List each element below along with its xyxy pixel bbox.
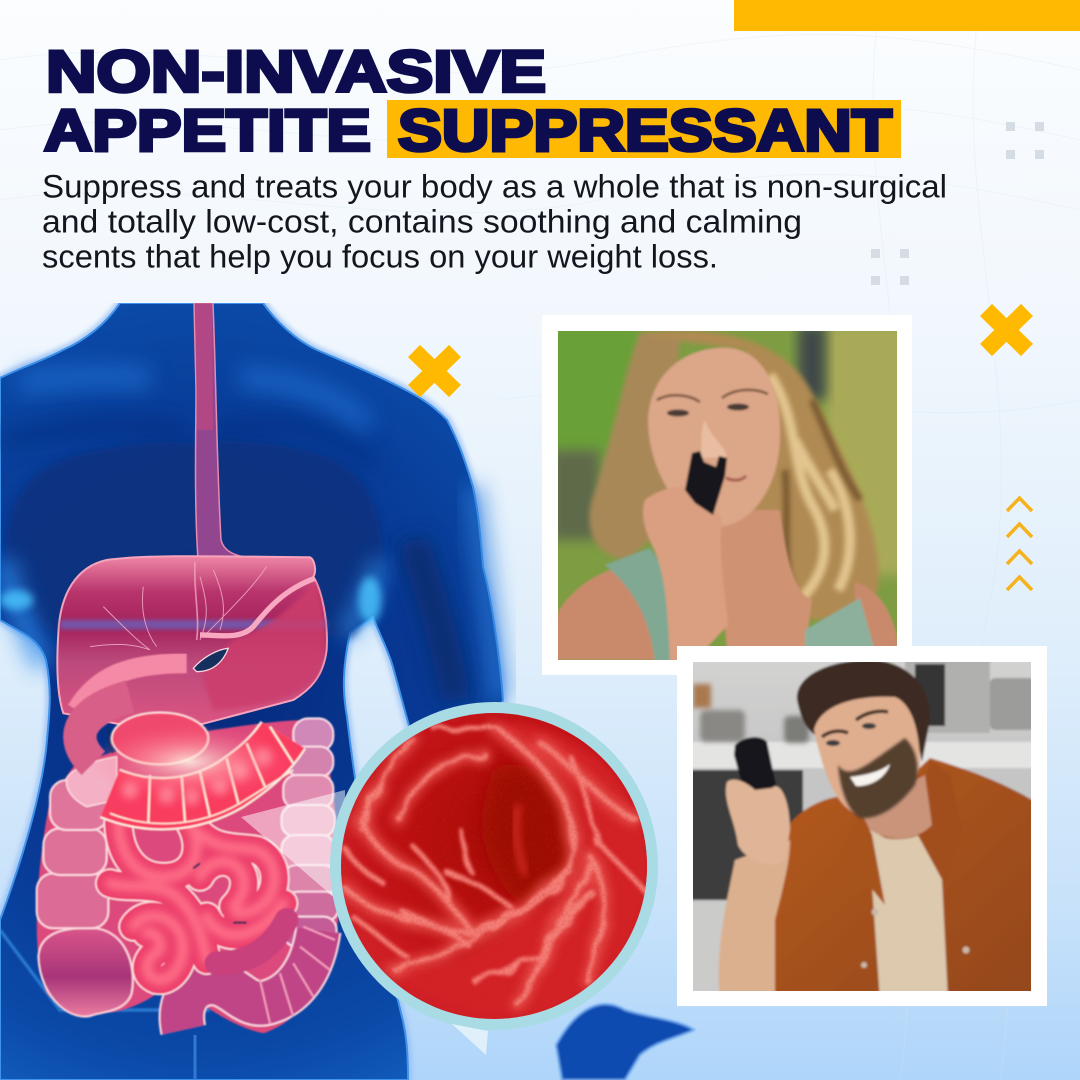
- gap marks: [108, 728, 247, 923]
- chevrons: [1007, 498, 1032, 590]
- photo frame: [677, 646, 1047, 1006]
- hand: [726, 780, 790, 864]
- stomach opening: [193, 648, 228, 672]
- outer tissue bank: [392, 724, 649, 1016]
- arm: [719, 840, 790, 1000]
- colon pale top: [66, 757, 117, 807]
- sigmoid colon: [182, 930, 318, 1030]
- lumen inner light: [516, 805, 525, 875]
- stomach edge: [200, 578, 315, 636]
- hair: [797, 660, 930, 762]
- lower hip glow left: [0, 930, 210, 1010]
- tank top right: [805, 598, 878, 662]
- colon haustra: [110, 727, 293, 824]
- microwave: [905, 655, 990, 733]
- inhaler: [734, 737, 776, 797]
- jacket buttons: [861, 908, 970, 968]
- jacket: [770, 758, 1040, 1000]
- counter: [685, 742, 1035, 768]
- pot: [700, 710, 745, 742]
- ascending colon lobes: [37, 780, 108, 928]
- torso silhouette: [0, 303, 503, 1080]
- pectoral mass: [7, 441, 383, 637]
- stomach lower loop: [112, 712, 208, 764]
- lumen: [482, 764, 572, 905]
- photo: man holding inhaler: [677, 646, 1047, 1006]
- small pot: [784, 716, 809, 743]
- lower right torso: [347, 560, 380, 637]
- blue band: [60, 620, 327, 629]
- hair left: [589, 332, 680, 560]
- title: [44, 40, 901, 164]
- eyes: [667, 404, 749, 416]
- esophagus: [193, 303, 242, 556]
- liver body: [57, 556, 327, 733]
- arm edge light: [473, 487, 500, 700]
- yellow cross left: [414, 351, 455, 391]
- decorative dots: [871, 122, 1044, 285]
- armpit glow right: [359, 577, 381, 623]
- oven: [685, 770, 803, 900]
- lower left shade: [550, 450, 600, 540]
- arm shade: [413, 540, 457, 700]
- photo frame: [542, 315, 912, 675]
- transverse colon: [110, 735, 283, 804]
- stomach body: [200, 580, 325, 710]
- highlight behind SUPPRESSANT: [387, 100, 901, 158]
- anatomy illustration: [0, 303, 694, 1080]
- description text: scents that help you focus on your weight loss.: [42, 238, 718, 274]
- shirt: [868, 828, 948, 1000]
- upper loop band: [80, 697, 130, 763]
- descending colon lobes: [282, 718, 338, 947]
- face: [648, 348, 780, 527]
- title line 1: NON-INVASIVE: [46, 40, 546, 104]
- highlighted word: SUPPRESSANT: [398, 98, 892, 164]
- small intestine loops: [110, 823, 283, 980]
- chest and shoulder shading: [0, 376, 500, 700]
- circle ring: [330, 702, 658, 1030]
- colon highlights: [121, 748, 272, 805]
- nose: [700, 420, 727, 458]
- red tissue: [341, 713, 647, 1019]
- top accent bar: [734, 0, 1080, 31]
- shelf items: [693, 684, 711, 708]
- tissue rim: [395, 727, 574, 972]
- cecum lump: [38, 928, 133, 1017]
- description text: and totally low-cost, contains soothing and calming: [42, 204, 802, 240]
- title line 2: APPETITE: [44, 98, 371, 164]
- shoulder light: [20, 376, 367, 427]
- tree trunk: [798, 325, 826, 400]
- filaments thick: [345, 742, 648, 1005]
- sigmoid ribs: [260, 927, 335, 1023]
- lips: [726, 476, 746, 480]
- hair top and right: [640, 330, 879, 620]
- hand: [643, 487, 728, 665]
- filaments soft halo: [345, 728, 635, 1005]
- transverse colon fill: [110, 735, 283, 804]
- sigmoid fill: [182, 930, 318, 1030]
- description text: Suppress and treats your body as a whole that is non-surgical: [42, 168, 947, 204]
- neck and chest: [705, 510, 812, 650]
- tank strap left: [605, 548, 690, 662]
- microwave door: [915, 664, 945, 726]
- collar left: [840, 812, 885, 905]
- hair shadows: [785, 400, 860, 600]
- central glow: [90, 724, 290, 800]
- right foliage: [825, 325, 905, 575]
- magnified tissue circle: [330, 702, 658, 1030]
- vertical lobe line: [195, 562, 198, 640]
- face: [814, 697, 920, 817]
- small pointer below circle: [452, 1024, 488, 1055]
- garden background: [550, 325, 905, 665]
- lower magenta loop: [217, 920, 287, 963]
- smile: [850, 764, 890, 786]
- esophagus top tint: [195, 303, 213, 430]
- lower left torso: [7, 560, 43, 667]
- brows: [657, 390, 768, 402]
- tissue grain: [341, 713, 647, 1019]
- eyes: [826, 723, 876, 746]
- brows: [822, 711, 888, 737]
- kitchen background: [685, 655, 1040, 1000]
- collar: [915, 760, 962, 885]
- beard: [838, 738, 918, 818]
- right shoulder: [855, 582, 900, 662]
- body center line: [194, 1035, 196, 1080]
- duodenum band: [77, 663, 187, 710]
- upper chest band: [0, 425, 377, 467]
- left foliage: [545, 325, 645, 455]
- description text: [42, 168, 947, 274]
- hair highlights: [770, 375, 850, 600]
- lower cabinet: [685, 902, 783, 997]
- hand: [556, 1004, 694, 1080]
- left shoulder: [550, 565, 690, 660]
- pink underlay: [37, 720, 340, 1033]
- liver and stomach: [57, 556, 327, 733]
- yellow cross right: [986, 310, 1027, 350]
- vessels: [90, 567, 267, 650]
- body glow: [0, 303, 503, 1080]
- armpit glow left: [0, 590, 33, 610]
- inhaler: [685, 451, 727, 515]
- intestines: [37, 697, 340, 1033]
- photo: woman using inhaler: [542, 315, 912, 675]
- toaster: [990, 678, 1035, 730]
- pointer to circle: [241, 790, 345, 907]
- neck: [860, 775, 932, 838]
